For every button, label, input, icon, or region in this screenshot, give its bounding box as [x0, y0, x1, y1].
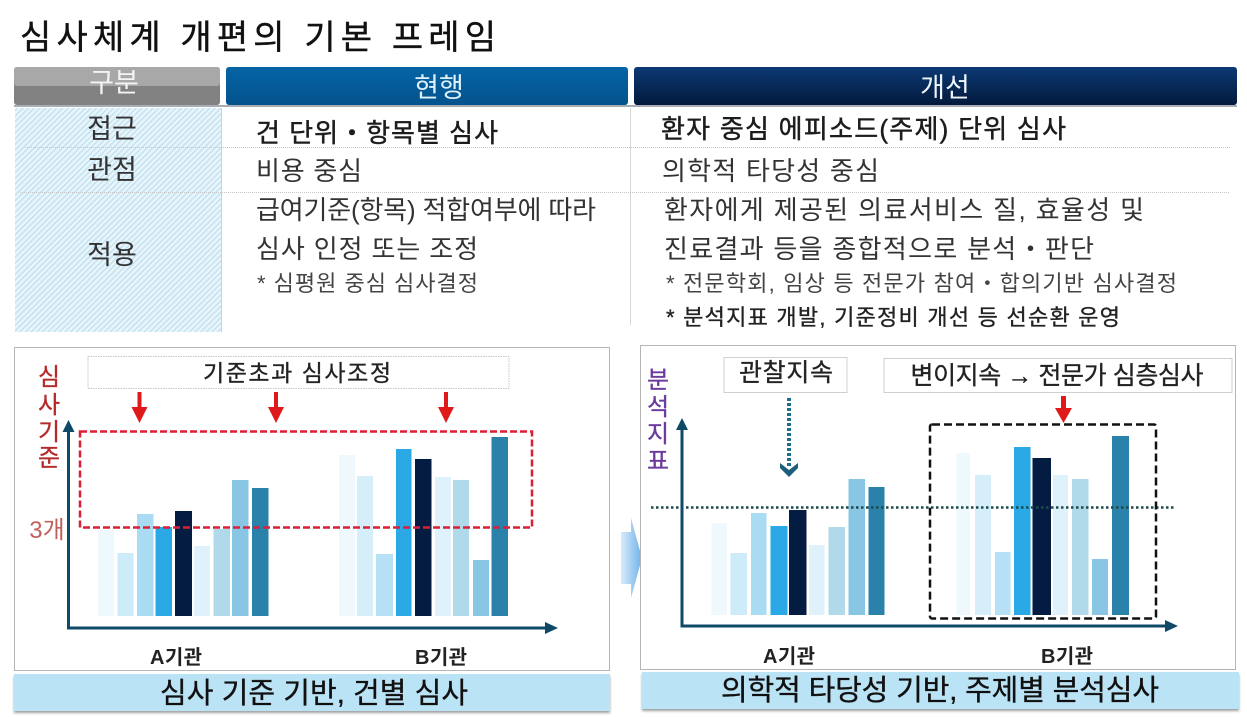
- row label column: [15, 108, 221, 332]
- caption: current review: 심사 기준 기반, 건별 심사: [160, 678, 468, 710]
- current column text: 건 단위・항목별 심사: [256, 118, 498, 148]
- red arrows: [132, 392, 454, 423]
- panel: improved review: [640, 346, 1236, 670]
- improved column text: 환자에게 제공된 의료서비스 질, 효율성 및: [664, 195, 1144, 225]
- current column text: * 심평원 중심 심사결정: [257, 271, 478, 296]
- current column text: 심사 인정 또는 조정: [256, 234, 478, 264]
- y axis label: 석: [647, 394, 669, 421]
- y axis label: 지: [647, 421, 669, 448]
- dotted threshold line: [651, 506, 1176, 509]
- row label column: 적용: [87, 240, 137, 270]
- improved column text: * 분석지표 개발, 기준정비 개선 등 선순환 운영: [666, 305, 1120, 330]
- improved column text: 의학적 타당성 중심: [662, 156, 879, 186]
- callout: 기준초과 심사조정: [88, 356, 509, 388]
- threshold box: [80, 432, 532, 528]
- header: 현행: [226, 67, 628, 105]
- callout: 기준초과 심사조정: 기준초과 심사조정: [203, 360, 391, 386]
- y axis label: 사: [38, 392, 60, 419]
- panel: current review: [14, 348, 610, 670]
- improved column text: [661, 114, 1177, 330]
- y axis label: [647, 367, 669, 475]
- caption: current review: [14, 674, 610, 711]
- current column text: 급여기준(항목) 적합여부에 따라: [256, 195, 596, 225]
- header: 구분: 구분: [89, 68, 139, 98]
- y axis label: 표: [647, 448, 669, 475]
- x axis labels: B기관: [1041, 645, 1093, 668]
- bar chart: A institution: [712, 479, 884, 615]
- y axis label: 심: [38, 364, 60, 391]
- header: 구분: [14, 67, 220, 105]
- axes: [62, 420, 558, 634]
- axes: [676, 418, 1178, 632]
- dotted teal arrow: [780, 398, 798, 477]
- caption: improved review: 의학적 타당성 기반, 주제별 분석심사: [721, 674, 1159, 707]
- callout: 변이지속: [884, 358, 1232, 392]
- x axis labels: [763, 645, 1093, 668]
- improved column text: 진료결과 등을 종합적으로 분석・판단: [664, 234, 1094, 264]
- bar chart: B institution: [956, 436, 1129, 615]
- y axis label: [38, 364, 60, 472]
- red arrow: [1055, 396, 1072, 423]
- bar chart: A institution: [98, 480, 268, 616]
- y axis label: 기: [38, 419, 60, 446]
- y axis label: 준: [38, 445, 60, 472]
- x axis labels: [150, 646, 467, 669]
- black dashed box: [930, 424, 1156, 618]
- title: 심사체계 개편의 기본 프레임: [20, 19, 496, 57]
- bar chart: B institution: [339, 437, 508, 616]
- arrow between panels: [621, 518, 642, 598]
- callout: 관찰지속: [724, 358, 847, 392]
- improved column text: 환자 중심 에피소드(주제) 단위 심사: [661, 114, 1066, 144]
- threshold label: 3개: [29, 517, 65, 544]
- y axis label: 분: [647, 367, 669, 394]
- comparison table: [14, 67, 1237, 332]
- callout: 변이지속: 변이지속 → 전문가 심층심사: [910, 362, 1204, 390]
- row label column: 접근: [87, 114, 137, 144]
- x axis labels: B기관: [415, 646, 467, 669]
- caption: improved review: [642, 672, 1239, 709]
- improved column text: * 전문학회, 임상 등 전문가 참여・합의기반 심사결정: [666, 271, 1177, 296]
- current column text: [256, 118, 596, 296]
- header: 현행: 현행: [414, 73, 464, 103]
- x axis labels: A기관: [763, 645, 815, 668]
- x axis labels: A기관: [150, 646, 202, 669]
- callout: 관찰지속: 관찰지속: [739, 359, 833, 387]
- current column text: 비용 중심: [256, 156, 362, 186]
- header: 개선: [634, 67, 1237, 105]
- row label column: 관점: [87, 155, 137, 185]
- header: 개선: 개선: [920, 73, 970, 103]
